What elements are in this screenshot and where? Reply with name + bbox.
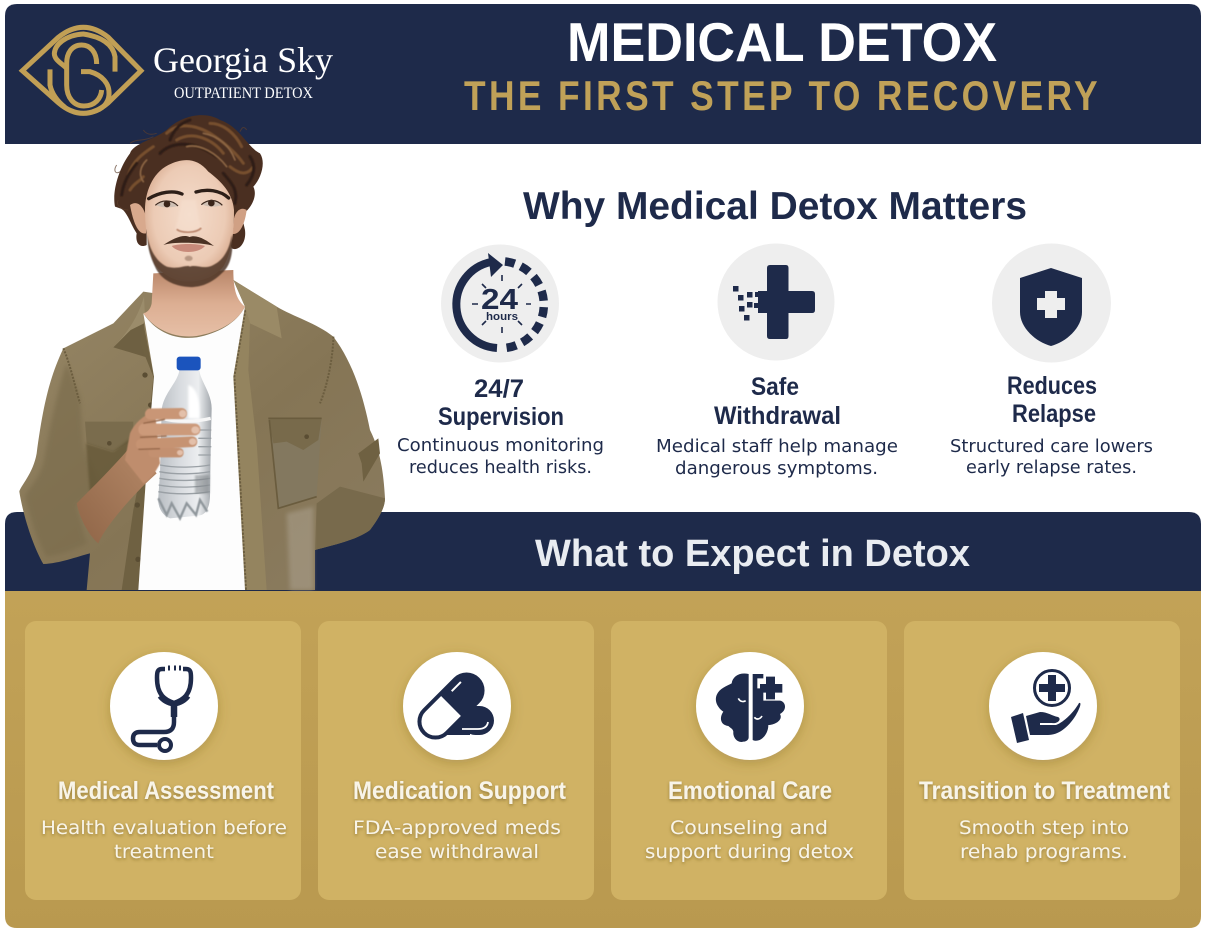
card text — [41, 777, 287, 863]
benefit description — [397, 435, 604, 478]
card text: Smooth step into — [959, 817, 1129, 839]
card text: Medical Assessment — [58, 777, 275, 805]
benefit description: Structured care lowers — [950, 436, 1153, 457]
brows — [149, 190, 229, 199]
icon: shield with cross — [992, 244, 1111, 362]
benefit title — [438, 375, 564, 431]
card text: rehab programs. — [960, 841, 1128, 863]
benefit: safe withdrawal — [656, 244, 898, 479]
logo wordmark: OUTPATIENT DETOX — [174, 85, 313, 102]
icon: 24 hours clock: hours — [486, 311, 518, 323]
benefit: reduces relapse — [950, 244, 1153, 478]
person holding water bottle — [19, 115, 385, 590]
icon: 24 hours clock: 24 — [481, 284, 518, 316]
card: emotional care — [611, 621, 887, 900]
icon: stethoscope — [133, 668, 191, 751]
forearm — [77, 443, 157, 543]
benefit title — [1007, 372, 1097, 428]
hand — [125, 408, 200, 483]
header band — [5, 4, 1201, 144]
beard — [147, 235, 232, 287]
benefit description: Continuous monitoring — [397, 435, 604, 456]
icon: hand holding plus — [1011, 670, 1080, 743]
card text — [645, 777, 854, 863]
benefit title: Reduces — [1007, 372, 1097, 400]
card: medication support — [318, 621, 594, 900]
card: medical assessment — [25, 621, 301, 900]
card text: support during detox — [645, 841, 854, 863]
moustache — [163, 236, 214, 246]
benefit description — [950, 436, 1153, 478]
card text — [353, 777, 567, 863]
jacket — [19, 280, 385, 590]
benefit title: Withdrawal — [714, 402, 841, 430]
lips — [172, 244, 205, 252]
benefit description: Medical staff help manage — [656, 436, 898, 457]
card text: Health evaluation before — [41, 817, 287, 839]
hair — [114, 115, 263, 249]
card text: ease withdrawal — [375, 841, 539, 863]
card text: Transition to Treatment — [919, 777, 1171, 805]
nose — [175, 200, 202, 233]
logo emblem — [22, 27, 141, 113]
heading: why medical detox matters: Why Medical Detox Matters — [523, 185, 1027, 228]
card text: treatment — [114, 841, 214, 863]
section band: what to expect — [5, 512, 1201, 591]
logo wordmark — [153, 40, 333, 102]
icon: 24 hours clock — [441, 244, 559, 362]
white t-shirt — [138, 307, 245, 590]
wispy strands — [115, 127, 247, 210]
card text: FDA-approved meds — [353, 817, 561, 839]
icon: brain with plus — [716, 673, 785, 742]
benefit description: dangerous symptoms. — [675, 458, 878, 479]
neck — [143, 270, 245, 336]
gold panel background — [5, 591, 1201, 928]
benefit title: 24/7 — [474, 375, 524, 403]
logo wordmark: Georgia Sky — [153, 40, 333, 80]
ears — [130, 203, 146, 233]
face — [145, 160, 234, 282]
head — [114, 115, 263, 287]
benefit description: early relapse rates. — [966, 457, 1137, 478]
icon: medical cross — [718, 244, 834, 360]
benefit: 24/7 supervision — [397, 244, 604, 478]
eyes — [156, 201, 177, 207]
main title — [464, 11, 1101, 119]
card text: Medication Support — [353, 777, 567, 805]
card text: Counseling and — [670, 817, 828, 839]
benefit title — [714, 373, 841, 430]
benefit title: Relapse — [1012, 400, 1096, 428]
card text: Emotional Care — [668, 777, 832, 805]
benefit description: reduces health risks. — [409, 457, 592, 478]
benefit title: Supervision — [438, 403, 564, 431]
card: transition to treatment — [904, 621, 1180, 900]
logo — [22, 27, 333, 113]
water bottle — [158, 357, 212, 518]
curls — [122, 120, 254, 203]
benefit description — [656, 436, 898, 479]
benefit title: Safe — [751, 373, 799, 401]
section band: what to expect: What to Expect in Detox — [535, 533, 970, 575]
main title: MEDICAL DETOX — [567, 11, 997, 73]
panel: step cards — [25, 621, 1180, 900]
icon: pills — [413, 668, 494, 744]
main title: THE FIRST STEP TO RECOVERY — [464, 72, 1101, 119]
card text — [919, 777, 1171, 863]
